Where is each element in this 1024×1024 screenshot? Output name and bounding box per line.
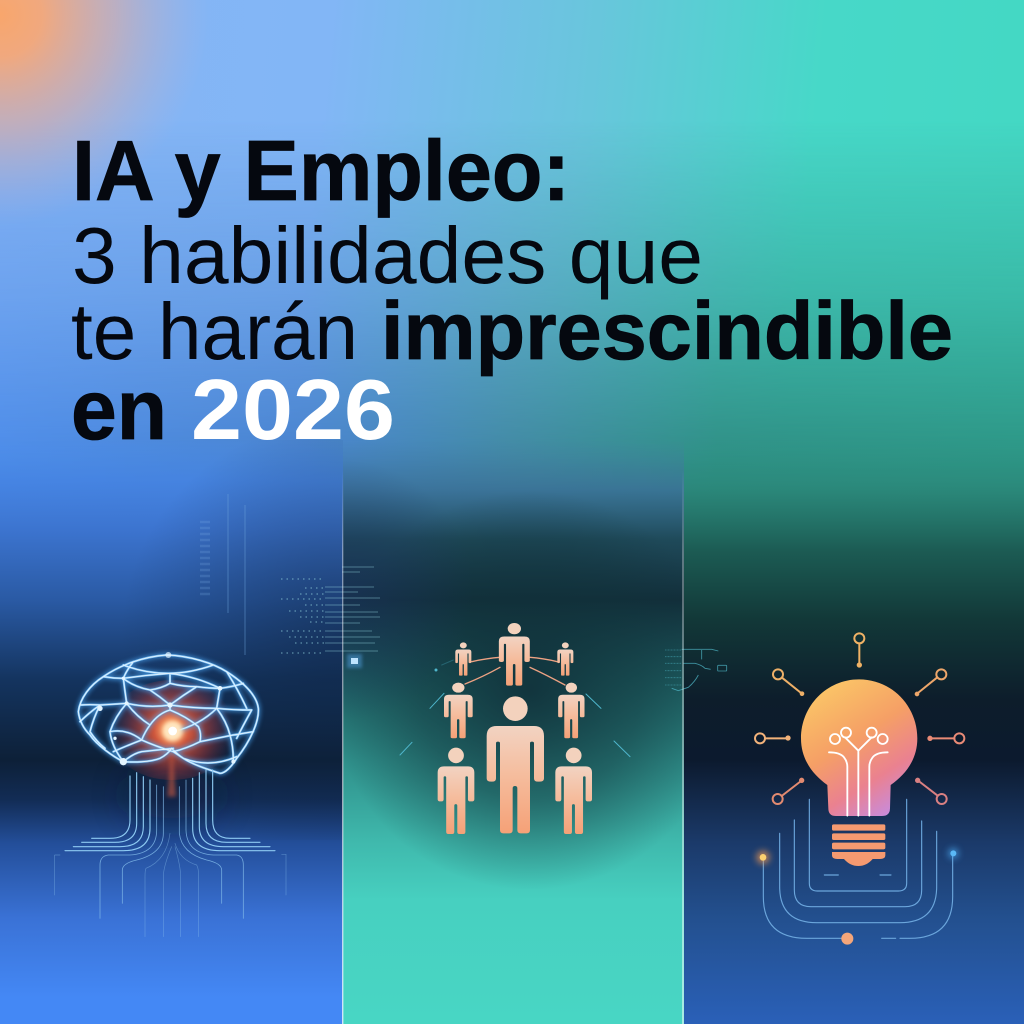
glowing square node <box>347 654 362 668</box>
icon: circuit traces below brain <box>54 770 286 937</box>
person: top right small <box>557 642 573 676</box>
background gradient <box>0 0 1024 520</box>
circuit lines <box>763 799 953 938</box>
idea rays <box>755 633 964 804</box>
person: middle left <box>444 683 473 738</box>
title line 4 <box>71 363 395 458</box>
title line 3: imprescindible <box>381 286 953 377</box>
title line 1: IA y Empleo: <box>72 124 570 219</box>
data texture: small circuit near second divider <box>665 649 727 691</box>
title line 3: te harán <box>71 287 358 376</box>
data texture: dots and lines near first divider <box>200 494 380 655</box>
panel: brain / AI <box>0 440 343 1024</box>
icon: group of people network <box>400 623 630 834</box>
connection lines <box>465 657 565 685</box>
person: bottom right <box>555 748 592 834</box>
panel: light bulb / creativity <box>684 440 1024 1024</box>
person: top centre <box>499 623 530 686</box>
filament <box>829 728 888 816</box>
bulb glass <box>801 679 917 816</box>
person: bottom left <box>438 748 474 834</box>
person: middle right <box>558 683 585 738</box>
panel dividers <box>343 470 683 1024</box>
title <box>71 124 953 458</box>
teal accent ticks <box>400 660 630 757</box>
title line 2: 3 habilidades que <box>72 211 703 300</box>
person: centre large <box>487 696 544 833</box>
panel: people / collaboration <box>343 440 684 1024</box>
bulb base <box>832 824 885 866</box>
icon: light bulb <box>755 633 964 945</box>
title line 4: 2026 <box>191 363 395 458</box>
glowing nodes <box>756 851 770 864</box>
title line 3 <box>71 286 953 377</box>
title line 4: en <box>71 363 167 458</box>
person: top left small <box>455 642 471 676</box>
icon: glowing neural brain <box>54 652 286 937</box>
